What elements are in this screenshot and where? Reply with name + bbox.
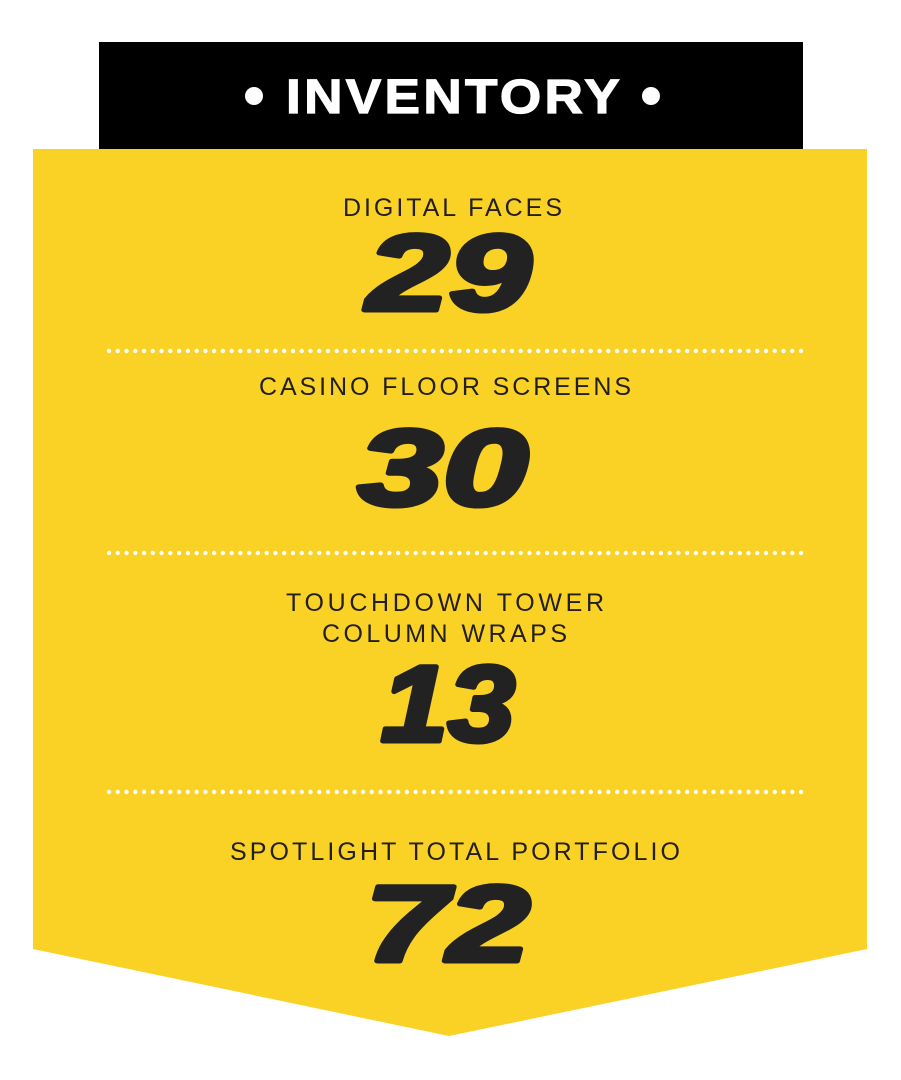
item: casino floor screens: 30 xyxy=(358,407,528,528)
item: touchdown tower column wraps: TOUCHDOWN TOWER xyxy=(286,589,604,617)
item: touchdown tower column wraps xyxy=(286,589,604,764)
item: touchdown tower column wraps: 13 xyxy=(381,643,515,764)
item: casino floor screens: CASINO FLOOR SCREENS xyxy=(259,373,631,401)
item: digital faces xyxy=(343,194,562,333)
panel: yellow pennant xyxy=(33,149,867,1036)
title banner: INVENTORY xyxy=(286,71,623,124)
item: casino floor screens xyxy=(259,373,631,528)
item: touchdown tower column wraps: COLUMN WRAPS xyxy=(322,620,567,648)
item: spotlight total portfolio xyxy=(230,838,680,984)
item: spotlight total portfolio: 72 xyxy=(365,863,530,984)
item: digital faces: 29 xyxy=(364,212,531,333)
title banner xyxy=(99,42,803,149)
item: digital faces: DIGITAL FACES xyxy=(343,194,562,222)
item: spotlight total portfolio: SPOTLIGHT TOTAL PORTFOLIO xyxy=(230,838,680,866)
